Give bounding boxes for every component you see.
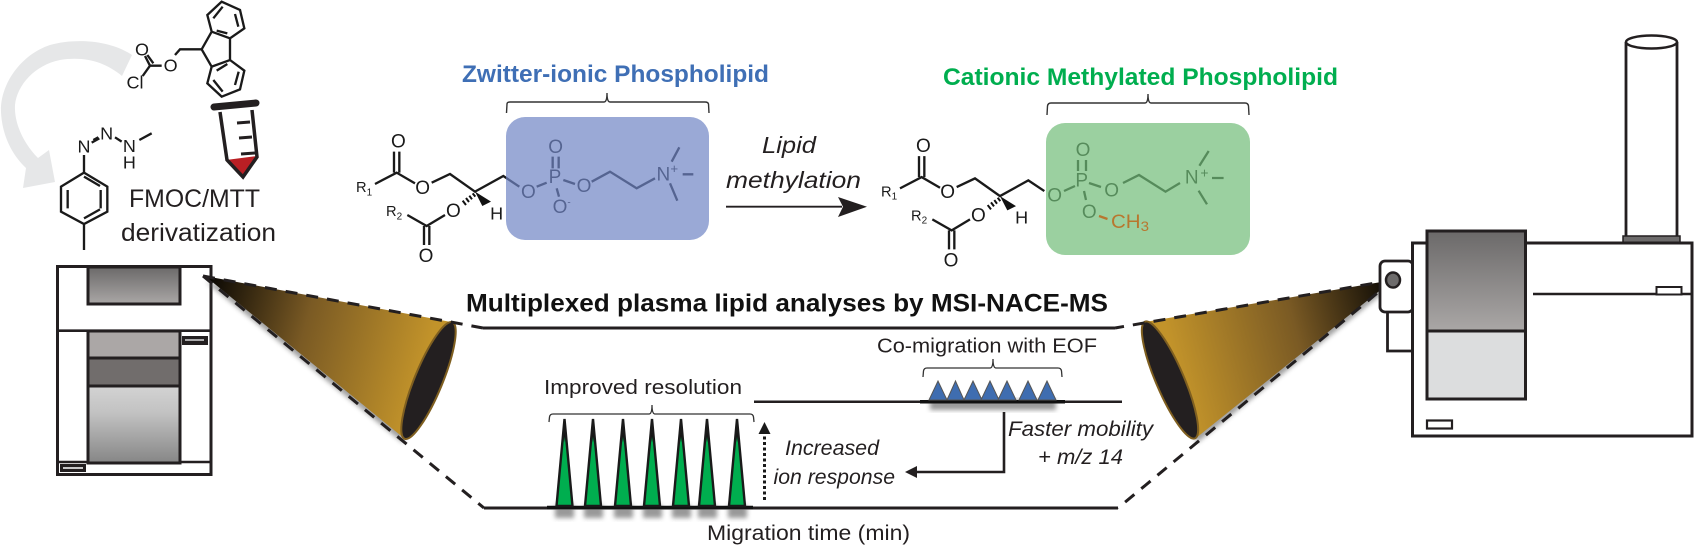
zwitter-ionic phospholipid structure: O: [548, 137, 563, 158]
zwitter-ionic phospholipid structure: O: [419, 246, 433, 267]
label: Lipid methylation: methylation: [726, 167, 861, 193]
methylated head group atoms: N: [1185, 168, 1199, 188]
label: Increased ion response: [774, 437, 895, 489]
left light cone: [205, 276, 465, 444]
zwitter-ionic phospholipid structure: R: [386, 204, 397, 220]
bracket over blue peaks: [923, 359, 1062, 377]
axis label: Migration time (min): Migration time (min): [707, 521, 910, 545]
bracket over green peaks: [549, 405, 754, 422]
label: Increased ion response: Increased: [785, 437, 880, 460]
label: Faster mobility + m/z 14: Faster mobility: [1008, 418, 1155, 441]
icon: curved grey arrow from FMOC to MTT: [1, 41, 132, 188]
methyl group label CH3: 3: [1141, 218, 1149, 234]
cationic methylated phospholipid structure: O: [940, 182, 955, 203]
label: Improved resolution: Improved resolution: [544, 377, 742, 399]
bracket over cationic head group: [1047, 94, 1249, 115]
zwitter-ionic phospholipid structure: H: [490, 203, 503, 223]
methyl group label CH3: [1099, 212, 1149, 234]
label: Faster mobility + m/z 14: + m/z 14: [1038, 446, 1123, 469]
cationic methylated phospholipid structure: 2: [922, 216, 928, 227]
zwitter-ionic phospholipid structure: O: [446, 201, 461, 222]
heading: Multiplexed plasma lipid analyses: Multiplexed plasma lipid analyses by MSI-NACE-MS: [466, 290, 1108, 318]
blue head-group highlight box: [506, 117, 709, 240]
cationic methylated phospholipid structure: R: [881, 184, 892, 200]
cationic methylated phospholipid structure: O: [971, 206, 986, 227]
zwitter-ionic phospholipid structure: O: [553, 197, 567, 218]
MTT molecule: [61, 123, 152, 250]
zwitter-ionic phospholipid structure: P: [549, 167, 561, 188]
green head-group highlight box: [1046, 123, 1250, 255]
zwitter-ionic phospholipid structure: [356, 131, 693, 267]
icon: mass spectrometer right: [1380, 36, 1692, 436]
methylated head group atoms: O: [1104, 180, 1119, 202]
MTT molecule: N: [77, 137, 90, 157]
label: FMOC/MTT derivatization: derivatization: [121, 219, 276, 247]
arrow: dotted increased response: [758, 422, 770, 500]
label: Co-migration with EOF: Co-migration with EOF: [877, 336, 1097, 358]
label: FMOC/MTT derivatization: [121, 185, 276, 247]
blue co-migrating peaks: [920, 381, 1065, 410]
right light cone: [1132, 280, 1393, 444]
zwitter-ionic phospholipid structure: O: [521, 182, 536, 203]
cationic methylated phospholipid structure: O: [944, 251, 958, 272]
methylated head group atoms: P: [1075, 170, 1088, 192]
heading: Zwitter-ionic Phospholipid: Zwitter-ionic Phospholipid: [462, 61, 769, 88]
icon: sample tube: [214, 103, 257, 177]
label: Lipid methylation: [726, 132, 861, 193]
zwitter-ionic phospholipid structure: R: [356, 180, 367, 196]
methylated head group atoms: +: [1200, 165, 1209, 181]
zwitter-ionic phospholipid structure: 1: [367, 187, 373, 198]
zwitter-ionic phospholipid structure: N: [656, 164, 670, 185]
MTT molecule: H: [123, 153, 136, 173]
FMOC-Cl molecule: Cl: [127, 72, 143, 92]
methylated head group atoms: [1047, 140, 1224, 223]
methylated head group atoms: O: [1082, 202, 1097, 223]
cationic methylated phospholipid structure: O: [916, 136, 931, 157]
heading: Cationic Methylated Phospholipid: Cationic Methylated Phospholipid: [943, 64, 1338, 91]
arrow: migration shift: [905, 412, 1004, 478]
label: FMOC/MTT derivatization: FMOC/MTT: [129, 185, 260, 213]
green resolved peaks: [547, 419, 753, 518]
label: Increased ion response: ion response: [774, 466, 895, 489]
cationic methylated phospholipid structure: 1: [892, 192, 898, 203]
zwitter-ionic phospholipid structure: +: [670, 161, 678, 176]
methylated head group atoms: O: [1047, 186, 1062, 206]
cationic methylated phospholipid structure: R: [911, 208, 922, 224]
bracket over zwitter-ionic head group: [506, 93, 709, 113]
methylated head group atoms: O: [1076, 140, 1090, 161]
MTT molecule: N: [123, 136, 136, 156]
label: Lipid methylation: Lipid: [762, 132, 817, 158]
zwitter-ionic phospholipid structure: 2: [397, 211, 403, 222]
icon: separation instrument left: [57, 266, 211, 474]
MTT molecule: N: [100, 123, 113, 143]
cationic methylated phospholipid structure: [881, 136, 1044, 272]
arrow: lipid methylation: [726, 197, 867, 217]
zwitter-ionic phospholipid structure: O: [415, 178, 430, 199]
methyl group label CH3: CH: [1111, 212, 1138, 233]
zwitter-ionic phospholipid structure: -: [567, 197, 571, 208]
electropherogram projection frame: [203, 276, 1393, 508]
zwitter-ionic phospholipid structure: O: [577, 176, 591, 197]
FMOC-Cl molecule: O: [135, 39, 149, 59]
FMOC-Cl molecule: [127, 2, 244, 97]
zwitter-ionic phospholipid structure: O: [391, 131, 406, 152]
label: Faster mobility + m/z 14: [1008, 418, 1155, 469]
cationic methylated phospholipid structure: H: [1015, 208, 1028, 228]
FMOC-Cl molecule: O: [164, 56, 178, 76]
